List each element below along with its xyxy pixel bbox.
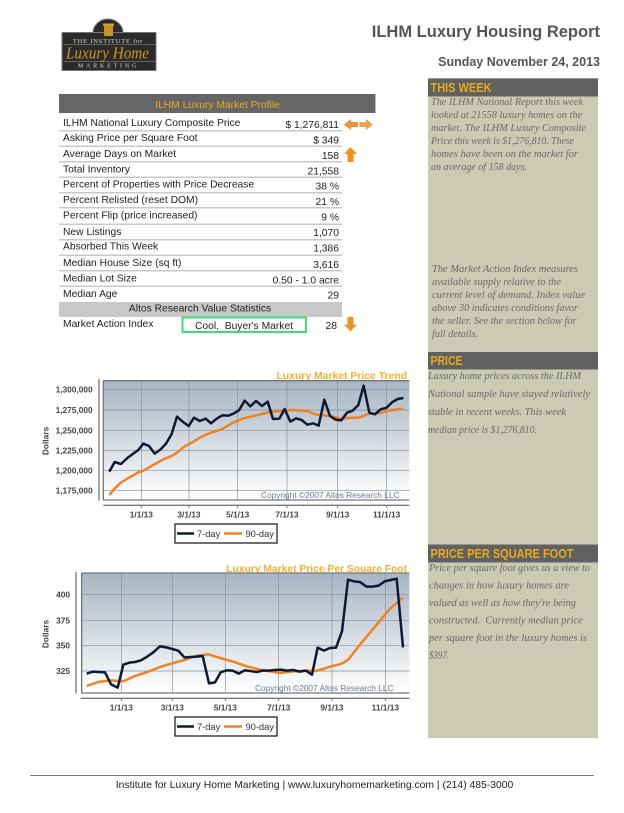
legend: 7-day bbox=[197, 722, 221, 732]
sidebar text: price per square foot bbox=[428, 562, 590, 662]
y axis labels: 350 bbox=[56, 640, 70, 650]
sidebar panel bbox=[427, 78, 598, 738]
row: percent flip: Percent Flip (price increased) bbox=[63, 210, 197, 222]
footer text: Institute for Luxury Home Marketing | www.luxuryhomemarketing.com | (214) 485-3000 bbox=[116, 780, 513, 791]
x axis labels: 9/1/13 bbox=[320, 702, 344, 712]
row: median lot size: Median Lot Size bbox=[63, 274, 137, 284]
row: average days on market bbox=[63, 149, 339, 162]
row: median age bbox=[63, 289, 339, 302]
legend: 90-day bbox=[246, 529, 274, 539]
y axis labels: 400 bbox=[56, 590, 70, 600]
x axis labels: 11/1/13 bbox=[372, 702, 399, 712]
table header bbox=[59, 94, 376, 113]
row: average days on market: Average Days on Market bbox=[63, 149, 176, 160]
row: median lot size bbox=[63, 274, 339, 286]
sidebar heading: price per square foot: PRICE PER SQUARE FOOT bbox=[430, 547, 574, 561]
sidebar heading: this week: THIS WEEK bbox=[430, 81, 492, 95]
icon: right arrow bbox=[360, 119, 373, 130]
row: composite price: $ 1,276,811 bbox=[285, 120, 339, 131]
x axis labels: 5/1/13 bbox=[214, 702, 237, 712]
report title: ILHM Luxury Housing Report bbox=[372, 23, 600, 41]
sidebar text: market action index: current level of demand. Index value bbox=[432, 289, 585, 301]
row: total inventory: Total Inventory bbox=[63, 164, 131, 176]
chart: Luxury Market Price Trend bbox=[41, 371, 409, 543]
x axis labels: 7/1/13 bbox=[267, 702, 291, 712]
row: percent flip: 9 % bbox=[321, 212, 339, 224]
sidebar text: this week: Price this week is $1,276,810. These bbox=[430, 135, 574, 147]
icon: left arrow bbox=[344, 119, 358, 130]
sidebar text: price: stable in recent weeks. This week bbox=[428, 406, 567, 418]
report date: Sunday November 24, 2013 bbox=[438, 55, 600, 69]
sidebar text: price per square foot: $397. bbox=[429, 650, 449, 662]
logo: Institute for Luxury Home Marketing bbox=[62, 19, 156, 70]
band: Altos Research Value Statistics: Altos Research Value Statistics bbox=[129, 304, 271, 314]
y axis labels: 325 bbox=[56, 666, 70, 676]
row: composite price: ILHM National Luxury Composite Price bbox=[63, 118, 241, 129]
sidebar text: price: Luxury home prices across the ILHM bbox=[427, 370, 582, 382]
y axis labels: 1,175,000 bbox=[56, 485, 93, 495]
legend: 90-day bbox=[246, 722, 274, 732]
x axis labels bbox=[110, 702, 399, 712]
row: new listings bbox=[63, 227, 339, 239]
sidebar text: price per square foot: valued as well as how they're being bbox=[429, 597, 576, 609]
chart title: Luxury Market Price Trend bbox=[276, 371, 407, 382]
row: median lot size: 0.50 - 1.0 acre bbox=[273, 276, 339, 286]
sidebar text: this week: an average of 158 days. bbox=[431, 161, 527, 173]
row: percent price decrease: 38 % bbox=[316, 182, 339, 192]
row: absorbed this week: 1,386 bbox=[313, 244, 339, 254]
row: asking price per square foot: $ 349 bbox=[313, 136, 339, 146]
x axis labels: 1/1/13 bbox=[110, 702, 133, 712]
row: total inventory: 21,558 bbox=[308, 166, 339, 178]
chart title: Luxury Market Price Per Square Foot bbox=[226, 564, 408, 575]
y axis labels: 1,300,000 bbox=[56, 385, 93, 395]
x axis labels bbox=[130, 509, 401, 519]
y axis labels bbox=[56, 590, 70, 676]
copyright note: Copyright ©2007 Altos Research LLC bbox=[255, 683, 394, 693]
x axis labels: 9/1/13 bbox=[326, 509, 350, 519]
sidebar text: price per square foot: constructed. Currently median price bbox=[429, 614, 583, 626]
legend: 7-day bbox=[197, 529, 221, 539]
sidebar text: market action index: above 30 indicates conditions favor bbox=[432, 302, 579, 314]
sidebar heading: this week bbox=[428, 78, 598, 96]
chart: Luxury Market Price Per Square Foot bbox=[41, 564, 409, 736]
legend bbox=[175, 524, 277, 543]
icon: down arrow bbox=[344, 317, 357, 332]
icon: up arrow bbox=[344, 147, 357, 162]
row: average days on market: 158 bbox=[322, 151, 339, 162]
90-day line bbox=[87, 598, 403, 686]
sidebar text: market action index bbox=[432, 263, 585, 340]
row: market action index: Cool. Buyer's Market bbox=[195, 321, 293, 332]
row: market action index bbox=[63, 318, 337, 332]
sidebar text: price bbox=[427, 370, 590, 436]
sidebar heading: price bbox=[428, 352, 598, 370]
table: ILHM Luxury Market Profile bbox=[59, 94, 376, 332]
x axis labels: 3/1/13 bbox=[177, 509, 201, 519]
sidebar text: this week: looked at 21558 luxury homes on the bbox=[431, 109, 582, 121]
sidebar text: price per square foot: Price per square foot gives us a view to bbox=[428, 562, 590, 574]
sidebar text: this week: homes have been on the market for bbox=[431, 148, 579, 160]
sidebar text: market action index: The Market Action Index measures bbox=[432, 263, 578, 275]
sidebar text: price per square foot: per square foot in the luxury homes is bbox=[428, 632, 587, 644]
sidebar text: this week bbox=[430, 96, 586, 173]
row: percent relisted: 21 % bbox=[316, 197, 339, 208]
row: median age: Median Age bbox=[63, 289, 118, 300]
table header: ILHM Luxury Market Profile bbox=[155, 100, 280, 111]
row: market action index: 28 bbox=[326, 321, 337, 332]
sidebar text: this week: The ILHM National Report this week bbox=[431, 96, 584, 108]
footer rule bbox=[30, 775, 594, 776]
row: new listings: 1,070 bbox=[313, 228, 339, 239]
sidebar text: this week: market. The ILHM Luxury Composite bbox=[431, 122, 586, 134]
y axis title: Dollars bbox=[41, 620, 51, 648]
copyright note: Copyright ©2007 Altos Research LLC bbox=[261, 490, 400, 500]
row: median age: 29 bbox=[328, 290, 339, 302]
sidebar text: market action index: full details. bbox=[432, 328, 478, 340]
x axis labels: 3/1/13 bbox=[161, 702, 184, 712]
logo: Institute for Luxury Home Marketing: Luxury Home bbox=[65, 44, 149, 62]
row: asking price per square foot: Asking Price per Square Foot bbox=[63, 133, 198, 144]
row: median house size: Median House Size (sq ft) bbox=[63, 258, 181, 269]
row: absorbed this week bbox=[63, 242, 339, 254]
row: percent price decrease: Percent of Properties with Price Decrease bbox=[63, 180, 254, 190]
row: percent price decrease bbox=[63, 180, 339, 192]
y axis title: Dollars bbox=[41, 427, 51, 455]
y axis labels: 1,225,000 bbox=[56, 445, 93, 455]
legend bbox=[175, 717, 277, 736]
y axis labels: 1,275,000 bbox=[56, 405, 93, 415]
row: market action index: Market Action Index bbox=[63, 319, 154, 330]
7-day line bbox=[109, 386, 403, 472]
row: percent relisted bbox=[63, 195, 339, 208]
y axis labels: 1,250,000 bbox=[56, 425, 93, 435]
band: Altos Research Value Statistics bbox=[59, 302, 342, 317]
90-day line bbox=[109, 409, 403, 495]
row: absorbed this week: Absorbed This Week bbox=[63, 242, 159, 252]
row: total inventory bbox=[63, 164, 339, 178]
row: composite price bbox=[63, 118, 339, 131]
row: median house size bbox=[63, 258, 339, 271]
sidebar heading: price: PRICE bbox=[430, 354, 462, 368]
y axis labels bbox=[56, 385, 93, 495]
sidebar text: price per square foot: changes in how luxury homes are bbox=[429, 580, 569, 592]
sidebar text: price: median price is $1,276,810. bbox=[428, 424, 537, 436]
sidebar text: market action index: the seller. See the section below for bbox=[432, 315, 577, 327]
y axis labels: 375 bbox=[56, 615, 70, 625]
y axis labels: 1,200,000 bbox=[56, 465, 93, 475]
x axis labels: 7/1/13 bbox=[275, 509, 299, 519]
logo: Institute for Luxury Home Marketing: MARKETING bbox=[78, 64, 139, 70]
row: percent relisted: Percent Relisted (reset DOM) bbox=[63, 195, 198, 206]
logo: Institute for Luxury Home Marketing: THE INSTITUTE for bbox=[73, 38, 143, 45]
row: asking price per square foot bbox=[63, 133, 339, 146]
row: percent flip bbox=[63, 210, 339, 224]
sidebar text: market action index: available supply relative to the bbox=[432, 276, 561, 288]
x axis labels: 5/1/13 bbox=[226, 509, 250, 519]
row: new listings: New Listings bbox=[63, 227, 121, 238]
row: median house size: 3,616 bbox=[313, 260, 339, 271]
sidebar text: price: National sample have stayed relatively bbox=[427, 388, 590, 400]
7-day line bbox=[87, 579, 403, 688]
x axis labels: 1/1/13 bbox=[130, 509, 153, 519]
x axis labels: 11/1/13 bbox=[373, 509, 401, 519]
